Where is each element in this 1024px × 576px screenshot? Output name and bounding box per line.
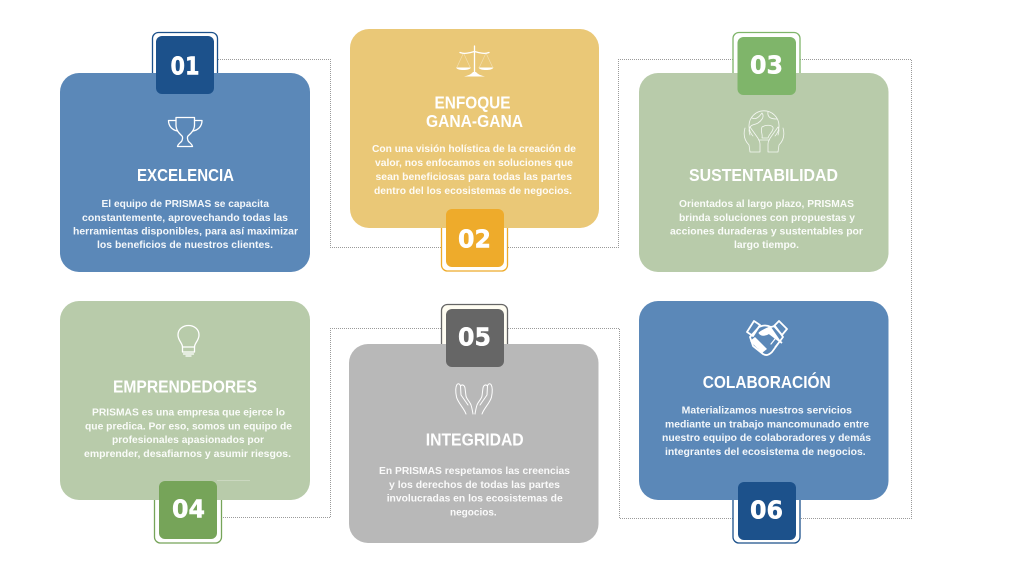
icon: handshake xyxy=(747,321,787,355)
body text: involucradas en los ecosistemas de xyxy=(387,494,563,505)
badge 06: 06 xyxy=(750,496,783,524)
panel: excelencia xyxy=(60,32,310,272)
body text xyxy=(372,144,576,197)
card 01 xyxy=(60,73,310,272)
icon: open hands xyxy=(456,384,492,414)
badge 04: 04 xyxy=(172,494,205,524)
badge frame 02 xyxy=(442,212,508,271)
body text xyxy=(84,408,292,460)
body text xyxy=(670,199,863,251)
body text: emprender, desafiarnos y asumir riesgos. xyxy=(84,449,291,460)
panel: integridad xyxy=(349,304,598,543)
body text xyxy=(662,406,871,458)
card 03 xyxy=(639,73,888,272)
badge frame 06 xyxy=(733,484,800,543)
icon: scales xyxy=(456,46,494,76)
body text: Materializamos nuestros servicios xyxy=(682,406,852,417)
card 02 xyxy=(350,29,599,228)
body text: valor, nos enfocamos en soluciones que xyxy=(375,158,573,169)
body text: y los derechos de todas las partes xyxy=(389,480,560,491)
body text: nuestro equipo de colaboradores y demás xyxy=(662,433,871,444)
body text: El equipo de PRISMAS se capacita xyxy=(102,199,269,210)
card 06 xyxy=(639,301,888,500)
body text: largo tiempo. xyxy=(734,240,799,251)
body text xyxy=(379,466,570,519)
badge frame 03 xyxy=(733,32,800,92)
heading: COLABORACIÓN xyxy=(703,371,831,392)
body text: En PRISMAS respetamos las creencias xyxy=(379,466,570,477)
heading: INTEGRIDAD xyxy=(426,430,524,450)
icon: globe in hands xyxy=(744,111,784,152)
body text xyxy=(73,199,298,251)
badge 05 xyxy=(446,309,504,367)
body text: acciones duraderas y sustentables por xyxy=(670,226,863,238)
heading: SUSTENTABILIDAD xyxy=(689,165,838,185)
badge 04 xyxy=(159,481,217,539)
body text: Con una visión holística de la creación de xyxy=(372,144,576,155)
heading: EMPRENDEDORES xyxy=(113,377,257,397)
panel: emprendedores xyxy=(60,301,310,543)
body text: sean beneficiosas para todas las partes xyxy=(376,172,572,183)
badge 02 xyxy=(446,209,504,267)
panel: colaboracion xyxy=(639,301,888,543)
badge 02: 02 xyxy=(458,224,491,254)
icon: light bulb xyxy=(178,326,199,356)
body text: dentro del los ecosistemas de negocios. xyxy=(374,186,572,197)
body text: herramientas disponibles, para así maximizar xyxy=(73,226,298,238)
body text: que predica. Por eso, somos un equipo de xyxy=(85,422,292,432)
body text: brinda soluciones con propuestas y xyxy=(679,213,855,224)
badge 05: 05 xyxy=(458,322,491,352)
body text: integrantes del ecosistema de negocios. xyxy=(665,447,866,458)
body text: PRISMAS es una empresa que ejerce lo xyxy=(92,408,285,419)
heading xyxy=(426,93,523,131)
body text: mediante un trabajo mancomunado entre xyxy=(665,419,869,430)
badge 01: 01 xyxy=(170,52,200,80)
badge frame 01 xyxy=(152,32,218,92)
badge 03 xyxy=(738,37,796,95)
badge frame 05 xyxy=(442,304,508,364)
card 05 xyxy=(349,344,598,543)
body text: los beneficios de nuestros clientes. xyxy=(97,240,273,251)
body text: profesionales apasionados por xyxy=(112,435,264,446)
icon: trophy xyxy=(168,118,202,146)
heading: GANA-GANA xyxy=(426,111,523,131)
body text: Orientados al largo plazo, PRISMAS xyxy=(679,199,854,210)
panel: enfoque gana-gana xyxy=(350,29,599,271)
card 04 xyxy=(60,301,310,500)
body text: negocios. xyxy=(450,508,497,519)
body text: constantemente, aprovechando todas las xyxy=(82,213,288,224)
badge 06 xyxy=(738,482,796,540)
heading: ENFOQUE xyxy=(434,93,510,113)
badge 03: 03 xyxy=(750,50,783,80)
badge frame 04 xyxy=(154,484,222,543)
badge 01 xyxy=(156,36,214,94)
heading: EXCELENCIA xyxy=(137,165,234,185)
panel: sustentabilidad xyxy=(639,32,888,272)
